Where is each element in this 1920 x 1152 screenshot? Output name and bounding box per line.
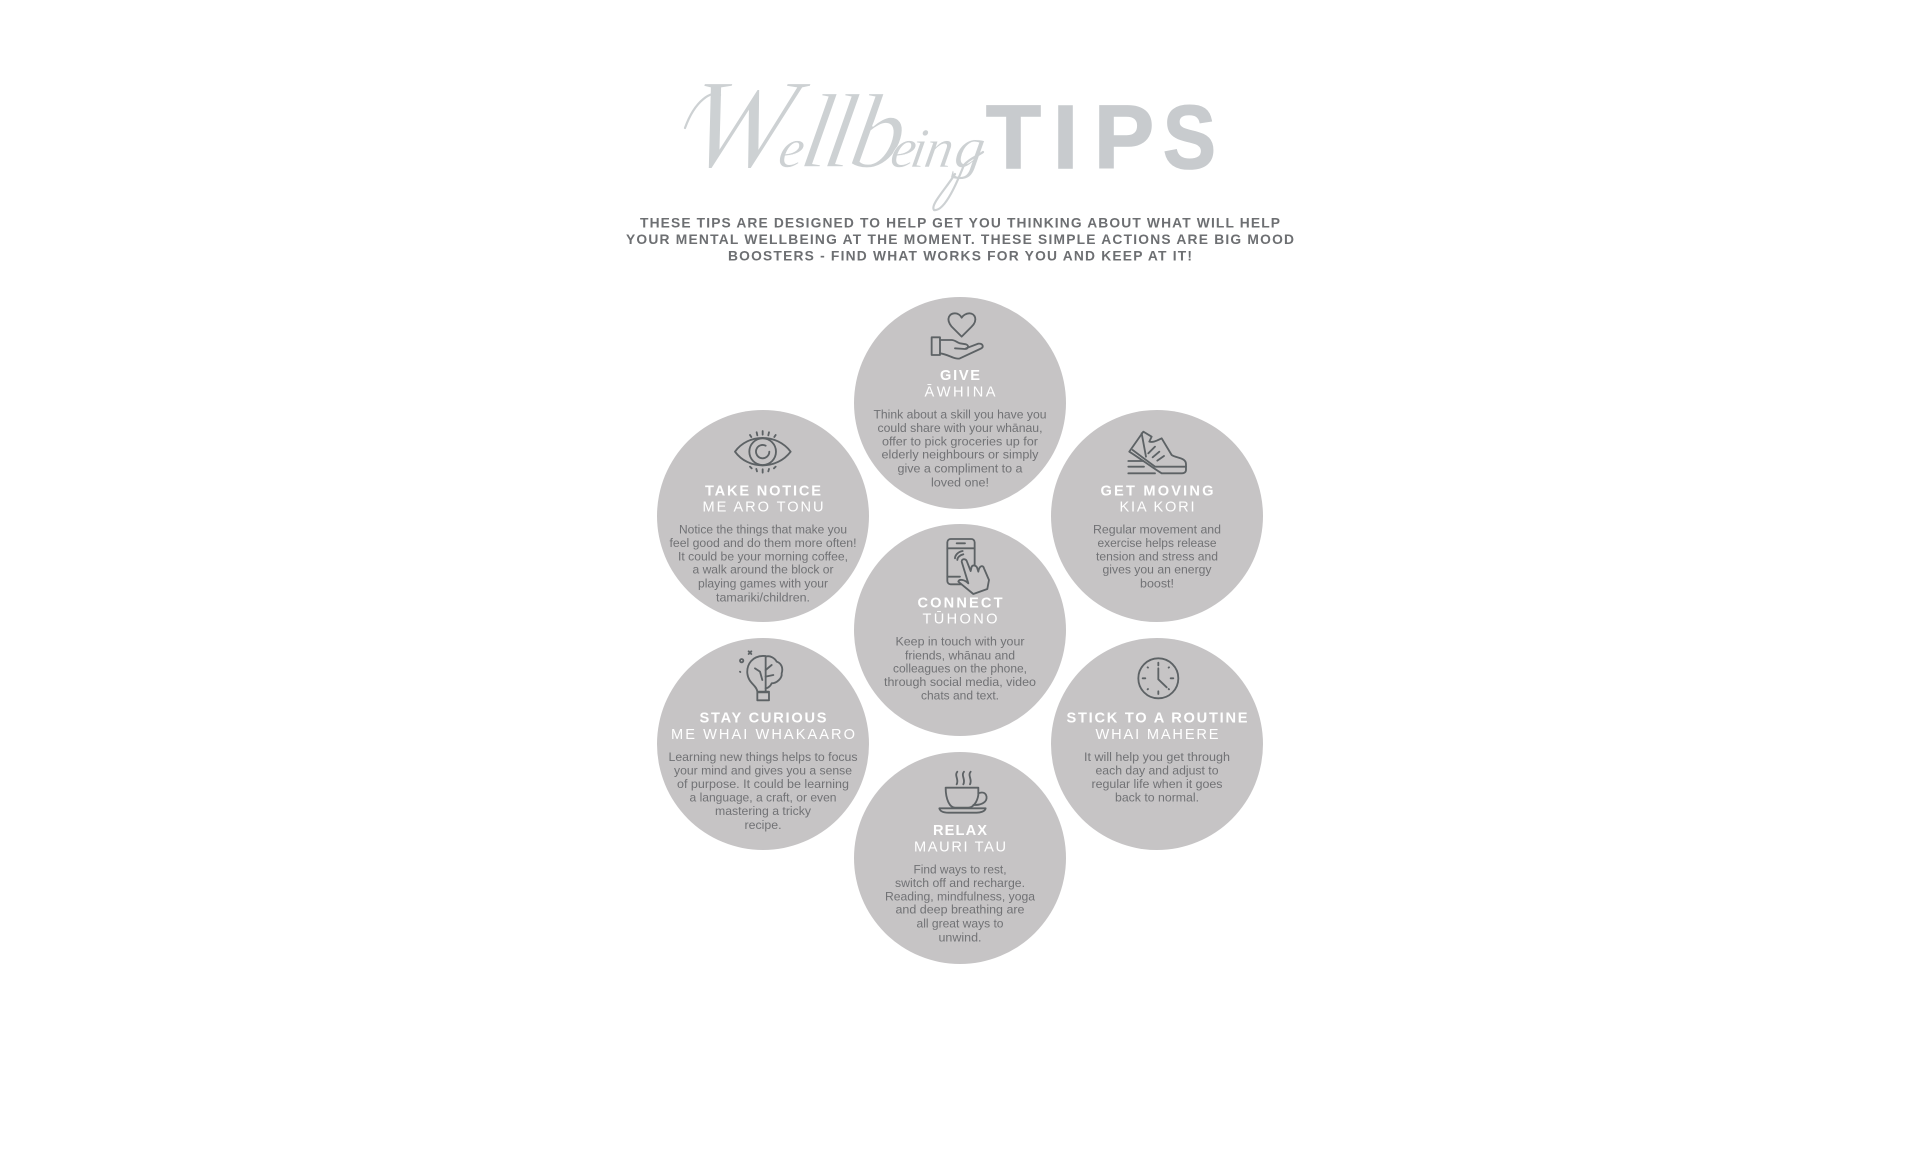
title [676,53,1216,210]
body text: and deep breathing are [896,903,1025,917]
panel: get moving: KIA KORI [1120,500,1194,516]
body text: elderly neighbours or simply [882,448,1039,462]
body text: friends, whānau and [905,648,1015,662]
body text: offer to pick groceries up for [882,434,1038,448]
body text: back to normal. [1115,790,1199,804]
body text: chats and text. [921,689,999,703]
icon: heart in hand [932,313,983,359]
word: TIPS: P [1094,88,1154,188]
body text: tamariki/children. [716,590,810,604]
body text: exercise helps release [1098,536,1217,550]
body text: Regular movement and [1093,522,1221,536]
body text: switch off and recharge. [895,876,1025,890]
panel: stick to a routine: WHAI MAHERE [1096,727,1219,743]
script word: Wellbeing: l [793,74,843,191]
body text [1093,522,1221,590]
word: TIPS: S [1163,86,1216,187]
body text [1084,750,1230,804]
panel: get moving [1051,410,1263,622]
heading: GET MOVING [1100,484,1214,500]
script word: Wellbeing: n [920,118,959,180]
script word: Wellbeing: i [906,118,933,180]
body text: tension and stress and [1096,549,1218,563]
body text: colleagues on the phone, [893,662,1027,676]
body text: boost! [1140,576,1174,590]
script word: Wellbeing: l [816,74,866,191]
body text: gives you an energy [1102,563,1212,577]
icon: clock [1138,658,1178,698]
panel: take notice [657,410,869,622]
script word: Wellbeing [676,53,1002,210]
body text: through social media, video [884,675,1036,689]
heading: TAKE NOTICE [705,484,821,500]
body text [884,635,1036,703]
body text [670,522,856,604]
body text: each day and adjust to [1096,764,1219,778]
panel: stick to a routine [1051,638,1263,850]
script word: Wellbeing: W [676,53,818,195]
body text: a language, a craft, or even [690,790,837,804]
script word: Wellbeing: b [842,74,916,191]
script word: Wellbeing: g [950,115,991,180]
panel: give [854,297,1066,509]
body text: It will help you get through [1084,750,1230,764]
body text: playing games with your [698,576,828,590]
script word: Wellbeing: e [774,118,810,180]
intro text: YOUR MENTAL WELLBEING AT THE MOMENT. THESE SIMPLE ACTIONS ARE BIG MOOD [626,232,1294,247]
heading: CONNECT [918,595,1003,611]
body text: all great ways to [916,916,1004,930]
body text: recipe. [744,818,782,832]
panel: stay curious: ME WHAI WHAKAARO [671,727,855,743]
intro text: BOOSTERS - FIND WHAT WORKS FOR YOU AND KEEP AT IT! [728,248,1192,264]
icon: lightbulb brain [740,651,782,700]
panel: relax [854,752,1066,964]
icon: running shoe [1128,432,1186,473]
body text [885,862,1035,944]
heading: GIVE [940,368,980,384]
body text: feel good and do them more often! [670,536,856,550]
heading: STAY CURIOUS [700,711,827,727]
word: TIPS: T [986,88,1041,188]
heading: RELAX [933,823,987,839]
body text: It could be your morning coffee, [678,549,848,563]
body text: regular life when it goes [1092,777,1222,791]
body text: Find ways to rest, [914,862,1006,876]
panel: stay curious [657,638,869,850]
icon: phone and hand [947,539,989,594]
heading: STICK TO A ROUTINE [1066,711,1248,727]
panel: give: ĀWHINA [924,385,996,401]
body text [668,750,858,832]
body text: Reading, mindfulness, yoga [885,889,1035,903]
body text: Keep in touch with your [896,635,1024,649]
word: TIPS: I [1053,88,1078,188]
panel: relax: MAURI TAU [914,840,1006,856]
body text: of purpose. It could be learning [677,777,849,791]
body text: unwind. [938,930,982,944]
intro text [626,216,1294,264]
body text: Think about a skill you have you [874,407,1047,421]
body text: a walk around the block or [692,563,834,577]
panel: connect [854,524,1066,736]
body text: Notice the things that make you [679,522,847,536]
panel: connect: TŪHONO [922,612,998,628]
icon: steaming cup [939,772,987,813]
body text [874,407,1047,489]
icon: eye [735,431,791,473]
intro text: THESE TIPS ARE DESIGNED TO HELP GET YOU THINKING ABOUT WHAT WILL HELP [640,216,1280,230]
panel: take notice: ME ARO TONU [702,500,824,516]
body text: give a compliment to a [898,461,1023,475]
body text: your mind and gives you a sense [674,764,852,778]
body text: mastering a tricky [715,804,812,818]
body text: Learning new things helps to focus [668,750,858,764]
script word: Wellbeing: e [886,118,922,180]
body text: loved one! [931,475,989,489]
body text: could share with your whānau, [878,421,1042,435]
word: TIPS [986,86,1216,188]
